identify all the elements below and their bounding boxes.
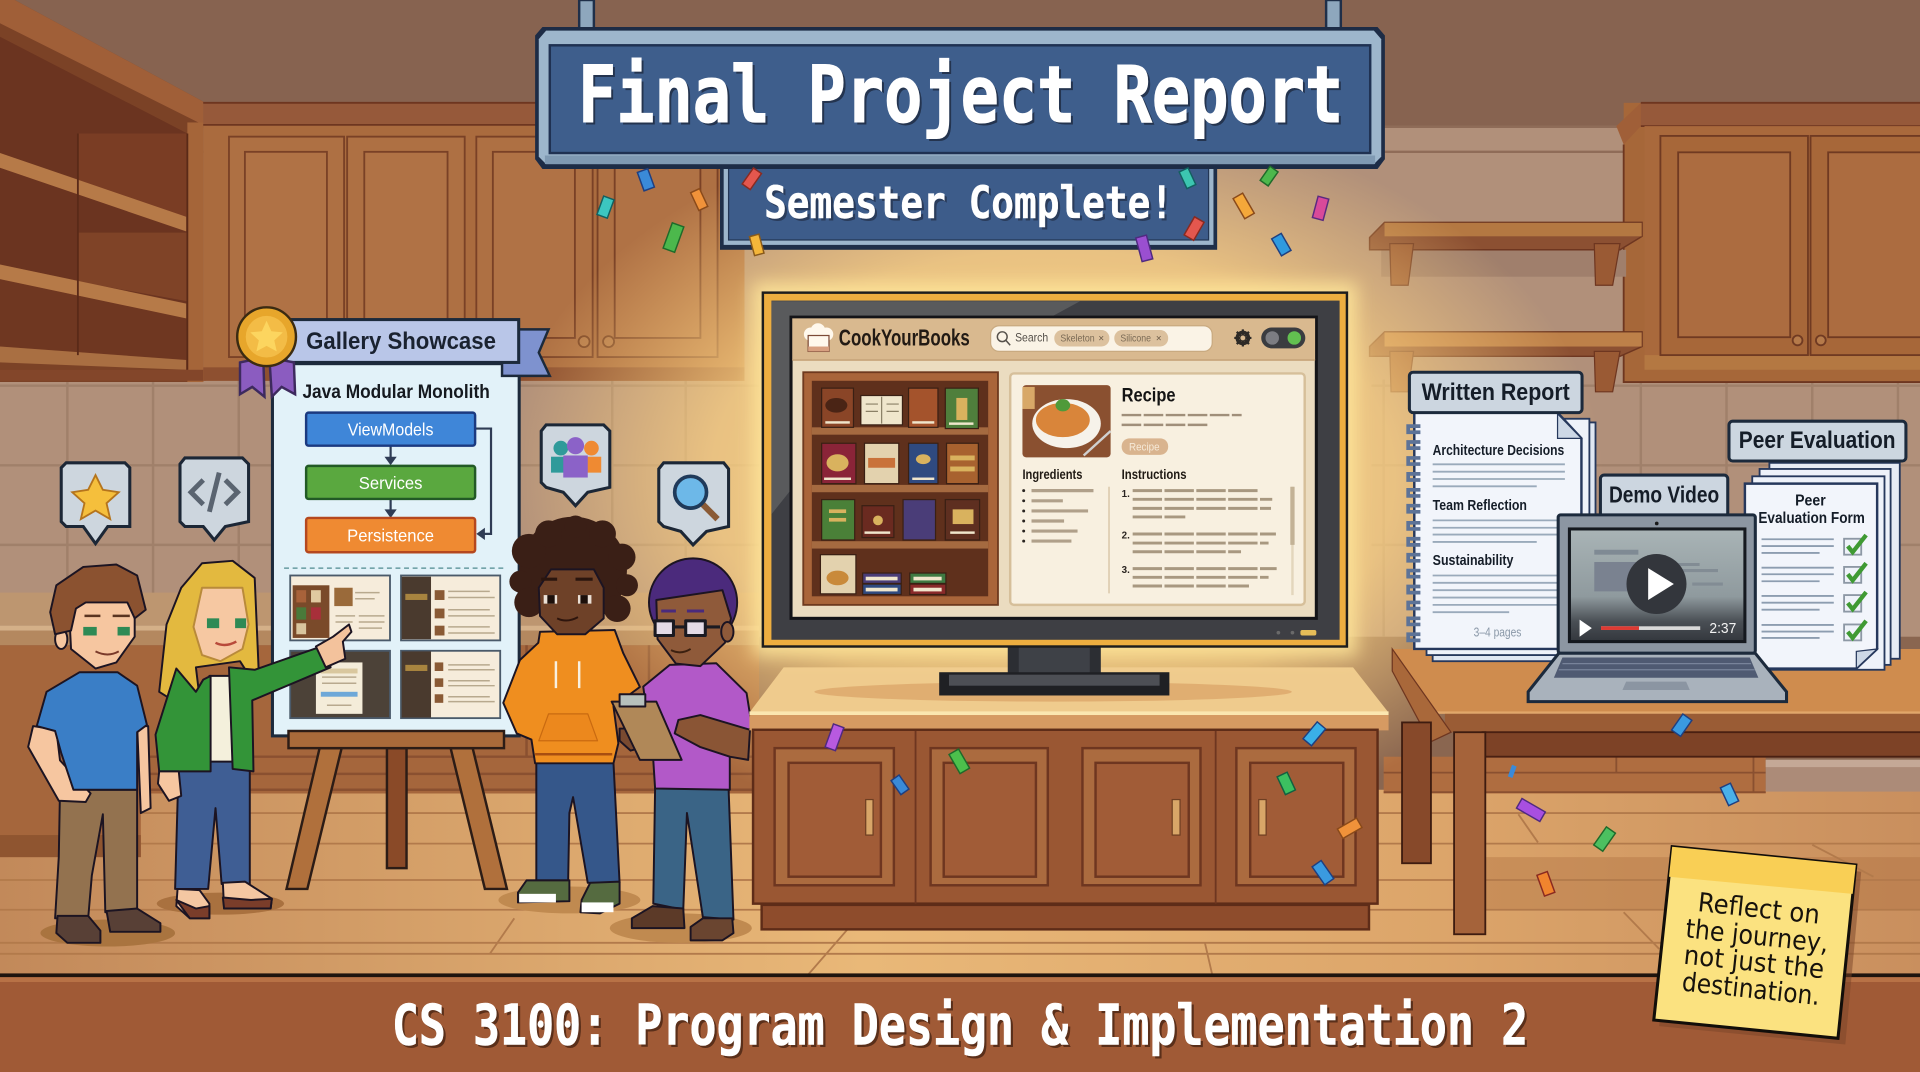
medal bbox=[237, 307, 296, 397]
poster heading: Java Modular Monolith bbox=[302, 381, 490, 403]
character: student in orange hoodie bbox=[498, 515, 640, 913]
search bar: Silicone bbox=[1120, 334, 1151, 345]
afro bbox=[509, 515, 638, 624]
written report document: Architecture Decisions bbox=[1433, 443, 1564, 459]
main title board: Final Project Report bbox=[580, 52, 1346, 143]
icon: team speech bubble bbox=[541, 425, 610, 506]
footer band bbox=[0, 973, 1920, 1072]
monitor bbox=[753, 283, 1357, 695]
icon: chef hat bbox=[804, 323, 833, 351]
legs bbox=[55, 790, 137, 918]
shirt bbox=[209, 676, 234, 762]
written report document: 3–4 pages bbox=[1474, 625, 1521, 640]
shirt bbox=[643, 663, 752, 790]
recipe panel: Recipe bbox=[1122, 385, 1176, 407]
clipboard bbox=[612, 702, 682, 760]
screen: CookYourBooks bbox=[839, 324, 970, 350]
central glow bbox=[502, 110, 1604, 845]
label bbox=[1600, 475, 1728, 517]
icon: star speech bubble bbox=[61, 463, 130, 544]
label: Peer Evaluation bbox=[1739, 427, 1896, 454]
architecture diagram: Services bbox=[359, 473, 423, 493]
main title board: Final Project Report bbox=[578, 50, 1343, 141]
sticky note: the journey, bbox=[1684, 914, 1830, 959]
peer evaluation document bbox=[1729, 421, 1906, 670]
laptop lid bbox=[1558, 515, 1755, 653]
console cabinet bbox=[749, 667, 1389, 929]
face bbox=[69, 600, 135, 669]
sticky note bbox=[1654, 847, 1861, 1044]
upper cabinets left bbox=[203, 103, 744, 381]
architecture diagram bbox=[306, 413, 491, 552]
app header bbox=[792, 318, 1315, 360]
bookshelf bbox=[803, 372, 998, 605]
hoodie bbox=[503, 630, 640, 763]
peer evaluation document: Evaluation Form bbox=[1758, 510, 1865, 527]
arms bbox=[28, 726, 91, 802]
hair bbox=[159, 561, 260, 704]
stand bbox=[939, 644, 1169, 695]
recipe panel: Ingredients bbox=[1022, 466, 1083, 482]
demo video laptop bbox=[1528, 475, 1787, 702]
checkboxes bbox=[1844, 539, 1861, 640]
search bar: Skeleton bbox=[1060, 334, 1095, 345]
wall shelves bbox=[1370, 222, 1642, 392]
face bbox=[539, 569, 604, 634]
character: blonde woman pointing bbox=[156, 561, 351, 918]
screenshot thumbnails bbox=[290, 575, 500, 718]
toggle bbox=[1261, 328, 1305, 348]
banner bbox=[286, 320, 519, 362]
search bar bbox=[991, 326, 1212, 351]
gallery poster on easel bbox=[237, 307, 550, 889]
left open shelf unit bbox=[0, 0, 206, 382]
ingredients list bbox=[1022, 489, 1093, 543]
architecture diagram: Persistence bbox=[347, 525, 434, 545]
easel bbox=[287, 748, 507, 889]
label: Written Report bbox=[1422, 379, 1570, 406]
subtitle board: Semester Complete! bbox=[764, 178, 1173, 229]
power indicators bbox=[1277, 630, 1316, 635]
written report document: Team Reflection bbox=[1433, 498, 1527, 514]
architecture diagram: ViewModels bbox=[348, 419, 434, 439]
icon: gear bbox=[1234, 329, 1251, 347]
sticky note: Reflect on bbox=[1696, 888, 1821, 931]
instructions list: 2. bbox=[1122, 531, 1130, 542]
instructions list: 1. bbox=[1122, 489, 1130, 500]
subtitle board: Semester Complete! bbox=[767, 180, 1176, 231]
character: student in purple shirt with clipboard bbox=[610, 558, 752, 943]
label bbox=[1729, 421, 1906, 461]
character: boy in blue shirt bbox=[28, 564, 175, 946]
confetti bbox=[597, 166, 1739, 896]
sticky note: not just the bbox=[1682, 941, 1826, 985]
ribbon tail bbox=[502, 329, 550, 376]
written report document bbox=[1408, 372, 1596, 661]
pointing hand bbox=[316, 624, 351, 667]
shirt bbox=[37, 672, 147, 790]
icon: magnifier speech bubble bbox=[659, 463, 729, 545]
recipe panel: Instructions bbox=[1122, 466, 1187, 482]
label bbox=[1409, 372, 1582, 413]
side table bbox=[1392, 649, 1920, 934]
jacket bbox=[156, 669, 211, 771]
hand behind clipboard bbox=[620, 729, 644, 751]
laptop base bbox=[1528, 653, 1787, 702]
video screen bbox=[1569, 529, 1745, 642]
scrollbar bbox=[1291, 487, 1293, 595]
recipe image bbox=[1022, 385, 1111, 457]
recipe panel: Recipe bbox=[1129, 442, 1160, 454]
banner: Gallery Showcase bbox=[306, 328, 496, 355]
sticky note: destination. bbox=[1680, 968, 1821, 1012]
poster board bbox=[272, 364, 519, 736]
spiral binding bbox=[1408, 426, 1420, 640]
upper cabinets right bbox=[1616, 103, 1920, 382]
video screen: 2:37 bbox=[1709, 621, 1736, 637]
hair bbox=[649, 558, 737, 647]
icon: code speech bubble bbox=[180, 458, 249, 540]
back counter and lower cabinets bbox=[0, 593, 1920, 857]
main title board bbox=[535, 27, 1385, 169]
hair bbox=[50, 564, 146, 634]
footer band: CS 3100: Program Design & Implementation 2 bbox=[394, 996, 1531, 1061]
title sign bbox=[535, 0, 1385, 250]
face bbox=[193, 588, 249, 661]
instructions list: 3. bbox=[1122, 565, 1130, 576]
search bar: × bbox=[1098, 334, 1104, 345]
wooden floor bbox=[0, 790, 1920, 976]
search bar: Search bbox=[1015, 332, 1048, 345]
footer band: CS 3100: Program Design & Implementation 2 bbox=[392, 993, 1528, 1058]
search bar: × bbox=[1156, 334, 1162, 345]
forearm bbox=[675, 715, 750, 760]
instructions list bbox=[1122, 489, 1277, 586]
peer evaluation document: Peer bbox=[1795, 493, 1826, 510]
recipe panel bbox=[1010, 373, 1305, 605]
screen bbox=[791, 317, 1316, 618]
label: Demo Video bbox=[1609, 482, 1719, 508]
subtitle board bbox=[720, 164, 1217, 250]
face bbox=[656, 590, 731, 666]
written report document: Sustainability bbox=[1433, 553, 1514, 569]
